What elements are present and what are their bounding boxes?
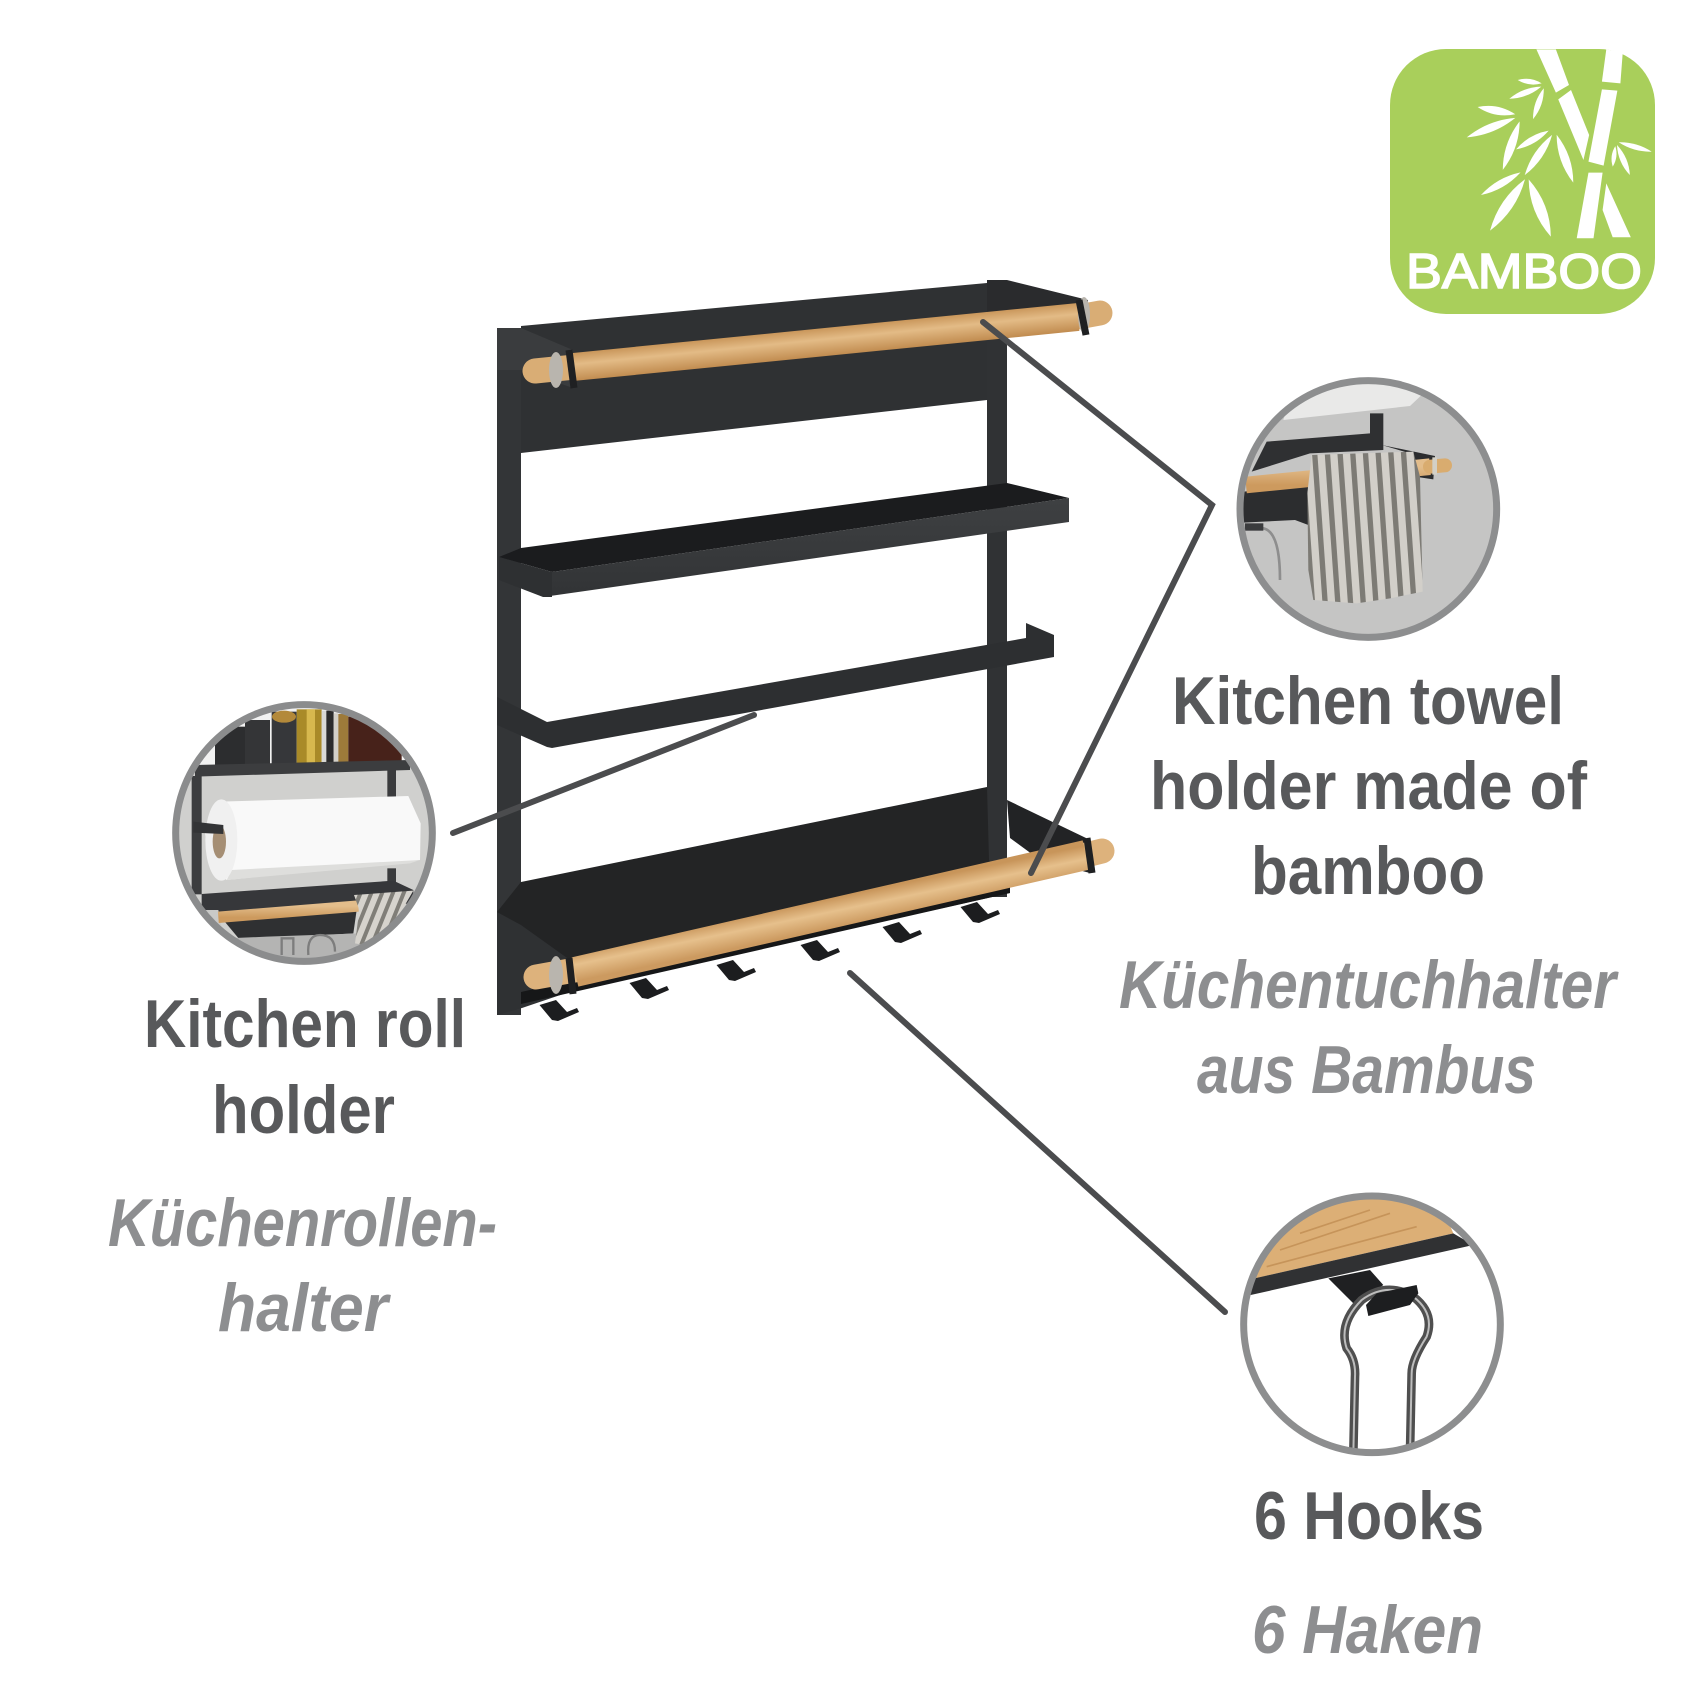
german subheading: Küchenrollen-: [108, 1185, 497, 1261]
german subheading: 6 Haken: [1252, 1592, 1483, 1668]
photo: towel on bamboo rod: [1233, 373, 1503, 643]
caption: kitchen roll holder: [108, 986, 497, 1346]
english heading: holder: [212, 1072, 395, 1148]
photo: kitchen roll: [170, 700, 440, 977]
caption: towel holder: [1119, 663, 1619, 1108]
bar under rod: [521, 882, 1010, 1004]
caption: hooks: [1252, 1478, 1484, 1668]
icon: bamboo badge: [1390, 49, 1655, 314]
english heading: [144, 986, 466, 1148]
german subheading: Küchentuchhalter: [1119, 947, 1619, 1023]
middle shelf tray: [499, 483, 1069, 597]
bottom tray: [497, 787, 1090, 1015]
german subheading: [108, 1185, 497, 1346]
german subheading: halter: [218, 1270, 391, 1346]
english heading: 6 Hooks: [1254, 1478, 1484, 1554]
product: wall rack: [497, 280, 1102, 1021]
german subheading: [1119, 947, 1619, 1108]
english heading: holder made of: [1150, 748, 1587, 824]
arrow: kitchen roll pointer: [453, 715, 754, 833]
english heading: bamboo: [1251, 833, 1485, 909]
german subheading: aus Bambus: [1197, 1032, 1536, 1108]
towel rail bar: [497, 623, 1054, 748]
english heading: Kitchen towel: [1172, 663, 1564, 739]
photo: hook detail: [1237, 1190, 1510, 1463]
rack frame and top panel: [497, 280, 1088, 1015]
six hooks: [540, 902, 1000, 1021]
bamboo rod: bottom: [536, 838, 1102, 994]
arrow: hooks pointer: [850, 973, 1225, 1312]
english heading: [1150, 663, 1587, 909]
arrow: towel holder pointer: [983, 322, 1212, 873]
english heading: Kitchen roll: [144, 986, 466, 1062]
badge label: BAMBOO: [1406, 245, 1642, 299]
bamboo rod: top: [535, 297, 1100, 388]
